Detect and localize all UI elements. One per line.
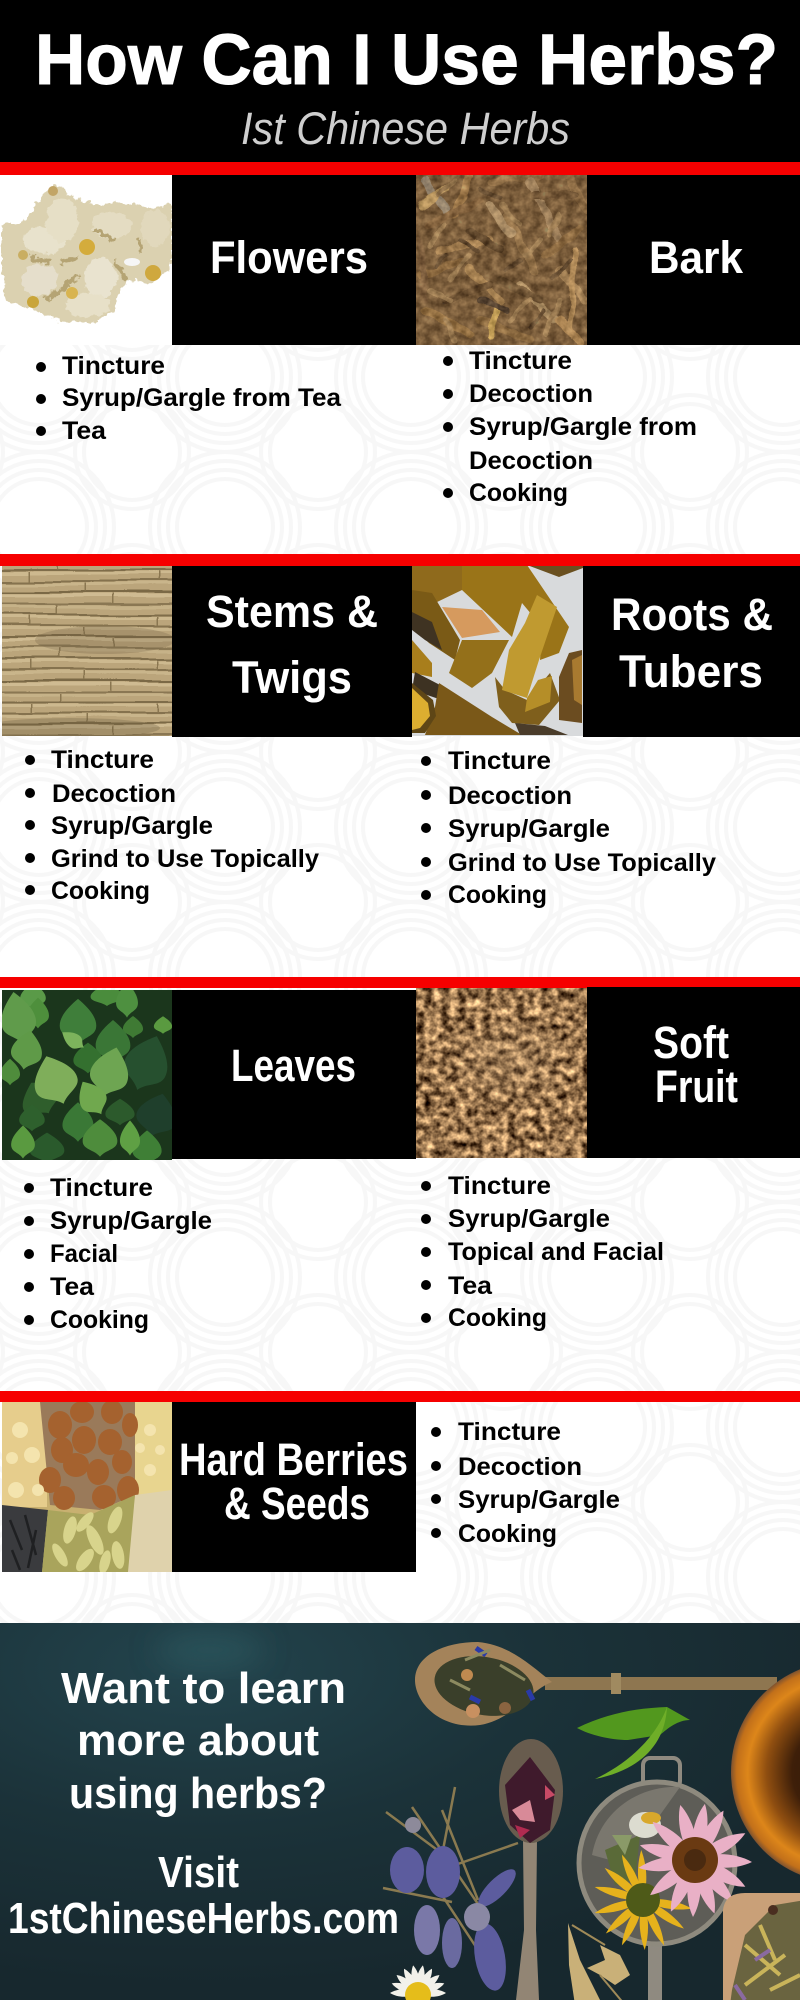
page background pattern — [0, 175, 800, 1623]
icon: tea cup — [731, 1661, 800, 1883]
list: leaves uses: Cooking — [50, 1306, 149, 1334]
icon: strainer — [579, 1758, 735, 2000]
label box: stems and twigs: Twigs — [232, 652, 352, 703]
icon: top spoon — [415, 1642, 777, 1726]
label box: flowers — [172, 175, 416, 345]
list: bark uses: Decoction — [469, 380, 593, 408]
label box: bark: Bark — [649, 232, 744, 283]
label box: soft fruit: Soft — [653, 1017, 729, 1068]
list: soft fruit uses — [421, 1172, 664, 1332]
list: soft fruit uses: Cooking — [448, 1304, 547, 1332]
list: leaves uses: Syrup/Gargle — [50, 1207, 212, 1235]
panel: leaves — [0, 982, 416, 1334]
list: bark uses: Decoction — [469, 447, 593, 475]
list: soft fruit uses: Topical and Facial — [448, 1238, 664, 1266]
icon: pink coneflower — [638, 1803, 752, 1917]
list: stems uses: Syrup/Gargle — [51, 812, 213, 840]
panel: soft fruit — [416, 987, 800, 1332]
label box: hard berries and seeds: Hard Berries — [179, 1434, 408, 1485]
photo: sliced roots — [412, 565, 583, 736]
panel: stems and twigs — [0, 555, 412, 905]
panel: roots and tubers — [412, 565, 800, 909]
list: seeds uses: Cooking — [458, 1520, 557, 1548]
list: soft fruit uses: Syrup/Gargle — [448, 1205, 610, 1233]
icon: wooden scoop — [723, 1893, 800, 2000]
heading: want to learn more: Want to learn — [61, 1664, 346, 1713]
text: visit website: Visit — [158, 1848, 239, 1897]
title: How Can I Use Herbs? — [35, 21, 778, 100]
panel: call to action — [0, 1623, 800, 2000]
label box: leaves: Leaves — [231, 1040, 356, 1091]
photo: nuts and seeds — [2, 1400, 172, 1575]
label box: stems and twigs — [172, 566, 412, 737]
heading: want to learn more: more about — [77, 1716, 319, 1765]
icon: chamomile in strainer — [629, 1812, 661, 1838]
list: roots uses — [421, 747, 716, 909]
list: bark uses: Cooking — [469, 479, 568, 507]
list: flower uses: Syrup/Gargle from Tea — [62, 384, 342, 412]
list: flower uses — [36, 352, 342, 445]
list: seeds uses: Decoction — [458, 1453, 582, 1481]
panel: flowers — [0, 175, 416, 445]
panel: hard berries and seeds — [2, 1400, 620, 1575]
label box: roots and tubers — [583, 566, 800, 737]
list: bark uses — [443, 347, 697, 507]
label box: flowers: Flowers — [210, 232, 368, 283]
list: roots uses: Decoction — [448, 782, 572, 810]
list: leaves uses: Facial — [50, 1240, 118, 1268]
red divider 1 — [0, 162, 800, 175]
list: soft fruit uses: Tincture — [448, 1172, 551, 1200]
list: roots uses: Cooking — [448, 881, 547, 909]
icon: green leaf — [577, 1707, 690, 1779]
text: visit website: 1stChineseHerbs.com — [8, 1894, 399, 1943]
list: stems uses: Decoction — [52, 780, 176, 808]
list: leaves uses: Tea — [50, 1273, 95, 1301]
list: leaves uses — [24, 1174, 212, 1334]
label box: soft fruit — [587, 987, 800, 1158]
list: bark uses: Tincture — [469, 347, 572, 375]
list: seeds uses — [431, 1418, 620, 1548]
list: seeds uses: Syrup/Gargle — [458, 1486, 620, 1514]
red divider 4 — [0, 1391, 800, 1402]
subtitle: Ist Chinese Herbs — [241, 103, 570, 154]
heading: want to learn more — [61, 1664, 346, 1818]
label box: roots and tubers: Tubers — [619, 646, 763, 697]
icon: lavender bunch — [383, 1787, 521, 1993]
list: seeds uses: Tincture — [458, 1418, 561, 1446]
list: stems uses — [25, 746, 319, 905]
list: roots uses: Grind to Use Topically — [448, 849, 716, 877]
list: stems uses: Grind to Use Topically — [51, 845, 319, 873]
label box: roots and tubers: Roots & — [611, 589, 773, 640]
label box: hard berries and seeds: & Seeds — [224, 1478, 370, 1529]
photo: dried mulberries — [416, 988, 587, 1158]
photo: herbs on dark board — [0, 1623, 800, 2000]
list: flower uses: Tea — [62, 417, 107, 445]
list: leaves uses: Tincture — [50, 1174, 153, 1202]
photo: green leaves — [2, 990, 172, 1160]
photo: bark pieces — [416, 175, 587, 345]
list: stems uses: Cooking — [51, 877, 150, 905]
text: visit website — [8, 1848, 399, 1943]
red divider 3 — [0, 977, 800, 988]
red divider 2 — [0, 554, 800, 566]
label box: leaves — [172, 990, 416, 1159]
label box: stems and twigs: Stems & — [206, 586, 378, 637]
icon: dried leaf — [568, 1923, 630, 2000]
list: roots uses: Tincture — [448, 747, 551, 775]
label box: hard berries and seeds — [172, 1402, 416, 1572]
list: roots uses: Syrup/Gargle — [448, 815, 610, 843]
heading: want to learn more: using herbs? — [69, 1769, 327, 1818]
header panel — [0, 0, 800, 162]
label box: bark — [587, 175, 800, 345]
icon: long spoon — [499, 1739, 563, 2000]
list: soft fruit uses: Tea — [448, 1272, 493, 1300]
icon: white daisy — [390, 1965, 446, 2000]
photo: dried chrysanthemum flowers — [0, 184, 172, 324]
list: stems uses: Tincture — [51, 746, 154, 774]
label box: soft fruit: Fruit — [655, 1061, 738, 1112]
list: flower uses: Tincture — [62, 352, 165, 380]
list: bark uses: Syrup/Gargle from — [469, 413, 697, 441]
panel: bark — [416, 175, 800, 507]
icon: yellow coneflower — [594, 1850, 693, 1950]
photo: bamboo stems — [2, 566, 172, 736]
